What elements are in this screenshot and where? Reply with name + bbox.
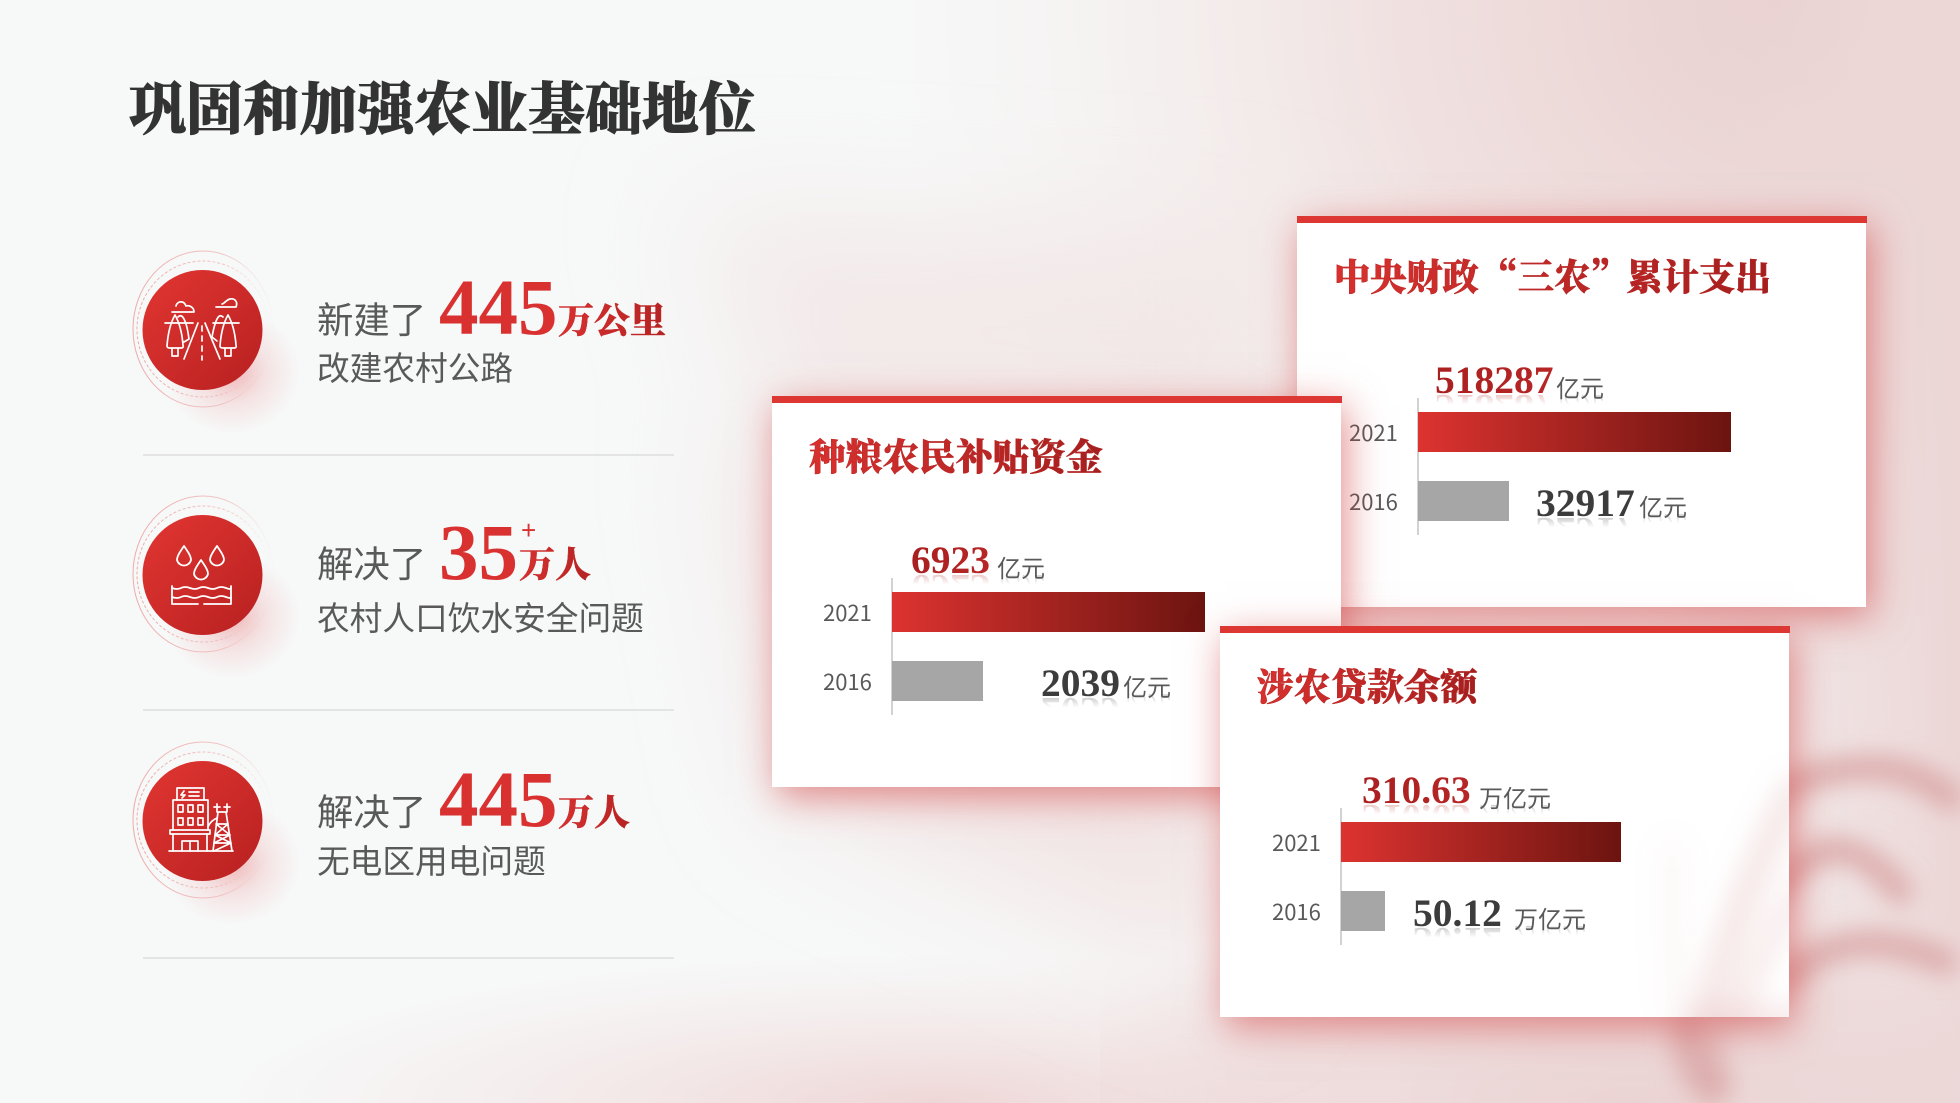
unit 2016: 亿元 xyxy=(1639,488,1687,523)
bar 2016 xyxy=(892,661,983,701)
row: drinking water xyxy=(132,496,644,666)
panel: agricultural loan balance xyxy=(1220,626,1789,1017)
description: 无电区用电问题 xyxy=(317,836,546,883)
year label 2021: 2021 xyxy=(1349,416,1398,448)
icon: building and pylon badge xyxy=(132,742,286,912)
bar 2021 xyxy=(892,592,1205,632)
year label 2021: 2021 xyxy=(1272,826,1321,858)
stat text line 1 xyxy=(317,510,591,597)
stat text line 1: 35 xyxy=(439,510,518,597)
value 2021: 310.63 xyxy=(1362,768,1471,812)
bar chart xyxy=(1349,358,1731,535)
unit 2016: 亿元 xyxy=(1123,668,1171,703)
axis xyxy=(891,578,893,715)
panel heading: 涉农贷款余额 xyxy=(1257,659,1477,711)
plant shadow overlay on loan panel xyxy=(1674,778,1789,1017)
value 2021: 518287 xyxy=(1435,358,1554,402)
year label 2016: 2016 xyxy=(823,665,872,697)
panel top bar xyxy=(1297,216,1867,223)
unit 2016: 万亿元 xyxy=(1514,900,1586,935)
stat text line 1: 万公里 xyxy=(558,293,666,344)
stat text line 1: + xyxy=(521,515,536,545)
year label 2016: 2016 xyxy=(1272,895,1321,927)
stat text line 1: 解决了 xyxy=(317,536,426,588)
bar 2016 xyxy=(1418,481,1509,521)
axis xyxy=(1340,808,1342,945)
unit 2021: 亿元 xyxy=(997,549,1045,584)
description: 改建农村公路 xyxy=(317,343,513,390)
unit 2021: 亿元 xyxy=(1556,369,1604,404)
stat text line 1: 解决了 xyxy=(317,784,426,836)
divider xyxy=(143,454,674,456)
divider xyxy=(143,957,674,959)
stat text line 1: 万人 xyxy=(558,785,630,836)
unit 2021: 万亿元 xyxy=(1479,779,1551,814)
year label 2021: 2021 xyxy=(823,596,872,628)
value 2016: 50.12 xyxy=(1413,891,1502,935)
value 2016: 2039 xyxy=(1041,661,1120,705)
stat text line 1: 445 xyxy=(439,757,558,844)
stat text line 1 xyxy=(317,265,666,352)
icon: road and trees badge xyxy=(132,250,286,422)
description: 农村人口饮水安全问题 xyxy=(317,593,644,640)
year label 2016: 2016 xyxy=(1349,485,1398,517)
icon: water drops badge xyxy=(132,496,286,666)
panel: central fiscal spending xyxy=(1297,216,1866,607)
panel top bar xyxy=(772,396,1342,403)
stat text line 1: 万人 xyxy=(519,537,591,588)
bar 2021 xyxy=(1418,412,1731,452)
value 2016: 32917 xyxy=(1536,481,1635,525)
stat text line 1: 新建了 xyxy=(317,292,426,344)
axis xyxy=(1417,398,1419,535)
bar 2016 xyxy=(1341,891,1385,931)
title: 巩固和加强农业基础地位 xyxy=(129,64,756,146)
stat text line 1: 445 xyxy=(439,265,558,352)
panel top bar xyxy=(1220,626,1790,633)
bar chart xyxy=(823,538,1205,715)
row: rural roads xyxy=(132,250,666,422)
panel heading: 种粮农民补贴资金 xyxy=(809,429,1103,481)
value 2021: 6923 xyxy=(911,538,990,582)
divider xyxy=(143,709,674,711)
stat text line 1 xyxy=(317,757,630,844)
bar chart xyxy=(1272,768,1621,945)
bar 2021 xyxy=(1341,822,1621,862)
panel: grain farmer subsidies xyxy=(772,396,1341,787)
row: electricity xyxy=(132,742,630,912)
